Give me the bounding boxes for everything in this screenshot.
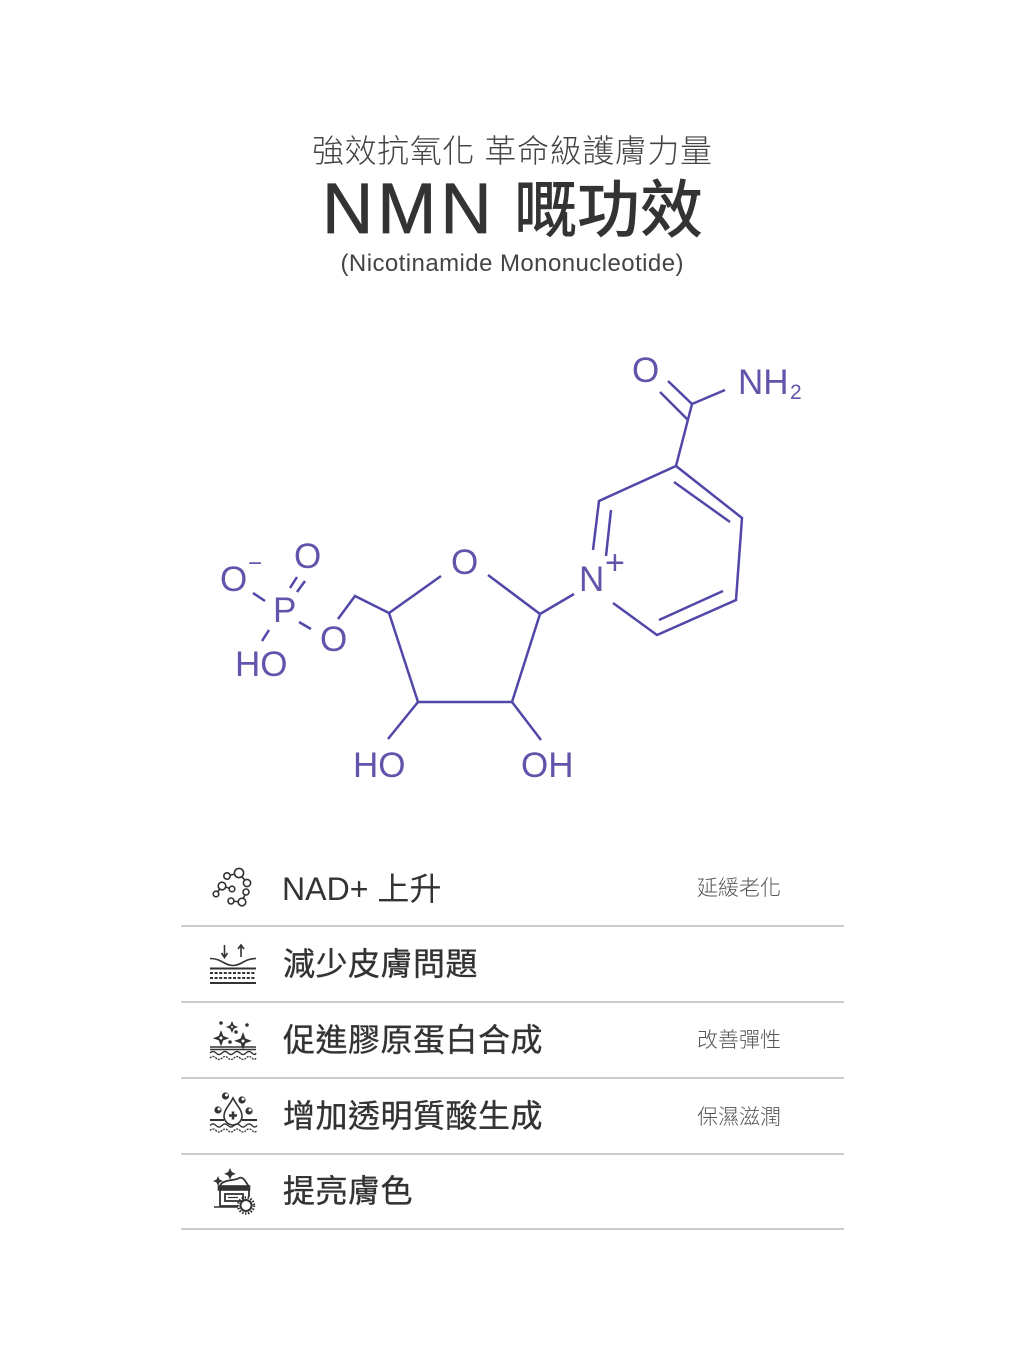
chemical structure: NMN molecule: O — [451, 543, 478, 582]
chemical structure: NMN molecule: O — [320, 620, 347, 659]
title: 嘅功效 — [514, 176, 703, 246]
chemical structure: NMN molecule: HO — [353, 746, 406, 785]
note: 延緩老化 — [697, 877, 781, 900]
chemical name: (Nicotinamide Mononucleotide) — [340, 250, 684, 277]
row 1: NAD+ — [213, 868, 781, 907]
note: 保濕滋潤 — [697, 1106, 781, 1129]
chemical structure: NMN molecule: O — [220, 560, 247, 599]
note: 改善彈性 — [697, 1029, 781, 1052]
row 3: collagen — [210, 1021, 781, 1060]
chemical structure: NMN molecule: HO — [235, 645, 288, 684]
atom labels: O — [632, 351, 659, 390]
chemical structure: NMN molecule: + — [605, 544, 625, 582]
icon: skin layers with arrows — [210, 945, 256, 983]
title: NMN — [322, 170, 496, 249]
row dividers — [181, 926, 844, 1229]
molecule bonds — [253, 381, 742, 740]
chemical structure: NMN molecule: P — [273, 591, 296, 630]
chemical structure: NMN molecule: N — [579, 560, 604, 599]
row 2: wrinkles — [210, 945, 478, 983]
icon: cream jar with sun — [213, 1168, 254, 1214]
label: 增加透明質酸生成 — [283, 1098, 543, 1134]
icon: drop over skin — [210, 1092, 257, 1132]
label: 促進膠原蛋白合成 — [283, 1022, 543, 1058]
icon: sparkles over skin — [210, 1021, 256, 1060]
row 5: brightening — [213, 1168, 413, 1214]
label: 減少皮膚問題 — [283, 946, 478, 982]
title — [322, 170, 703, 249]
icon: molecule chain — [213, 868, 251, 906]
chemical structure: NMN molecule: O — [294, 537, 321, 576]
chemical structure: NMN molecule — [220, 351, 802, 785]
label: NAD+ 上升 — [282, 871, 442, 907]
chemical structure: NMN molecule: OH — [521, 746, 574, 785]
row 4: hyaluronic acid — [210, 1092, 781, 1134]
subtitle: 強效抗氧化 革命級護膚力量 — [312, 133, 712, 169]
chemical structure: NMN molecule: − — [248, 550, 262, 577]
label: 提亮膚色 — [283, 1173, 413, 1209]
chemical structure: NMN molecule: NH — [738, 363, 789, 402]
chemical structure: NMN molecule: 2 — [790, 381, 802, 404]
